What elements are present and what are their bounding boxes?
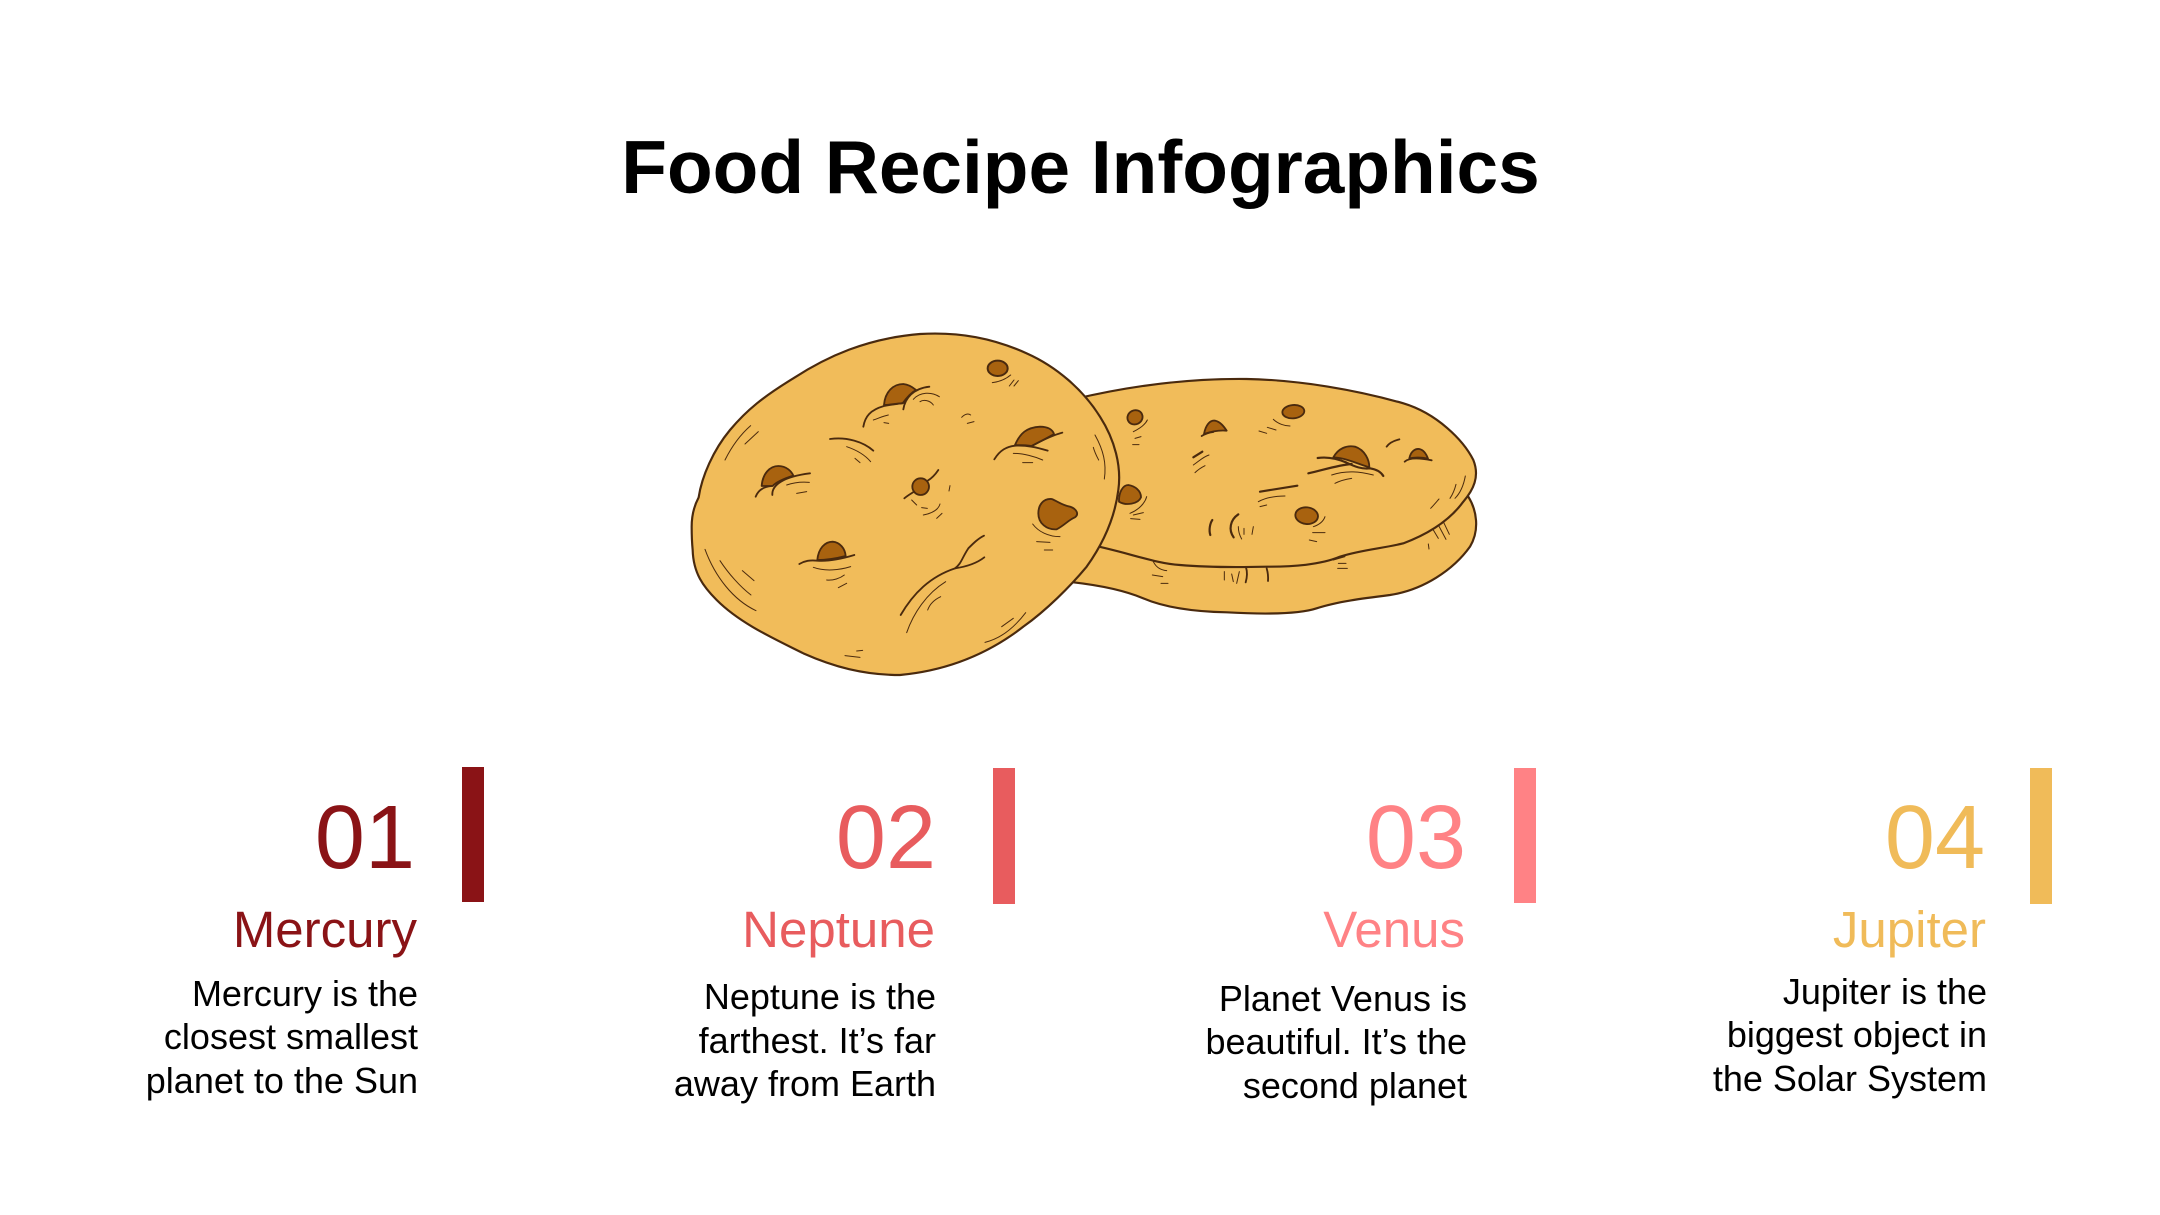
description Jupiter: the Solar System [1713,1058,1987,1099]
description Jupiter: Jupiter is the [1783,971,1987,1012]
description Mercury: Mercury is the [192,973,418,1014]
title: Food Recipe Infographics [621,125,1540,209]
icon: front cookie [692,334,1119,675]
description Neptune: away from Earth [674,1063,936,1104]
heading Mercury: Mercury [233,901,417,958]
panel: 04 Jupiter [1713,768,2052,1099]
heading Neptune: Neptune [742,901,935,958]
description Venus [1205,978,1467,1106]
icon: back cookies [1060,379,1476,614]
description Venus: beautiful. It’s the [1205,1021,1467,1062]
heading Jupiter: Jupiter [1833,901,1986,958]
description Mercury: planet to the Sun [146,1060,418,1101]
accent bar 02 [993,768,1015,904]
number 01: 01 [315,788,415,888]
description Neptune [674,976,936,1104]
description Neptune: Neptune is the [704,976,936,1017]
description Mercury [146,973,418,1101]
number 02: 02 [836,788,936,888]
description Neptune: farthest. It’s far [699,1020,936,1061]
panel: 02 Neptune [674,768,1015,1104]
description Jupiter: biggest object in [1727,1014,1987,1055]
panel: 01 Mercury [146,767,484,1101]
number 03: 03 [1366,788,1466,888]
accent bar 01 [462,767,484,902]
number 04: 04 [1885,788,1985,888]
description Jupiter [1713,971,1987,1099]
description Venus: Planet Venus is [1219,978,1467,1019]
illustration: cookies [692,334,1476,675]
heading Venus: Venus [1323,901,1465,958]
accent bar 03 [1514,768,1536,903]
description Venus: second planet [1243,1065,1467,1106]
accent bar 04 [2030,768,2052,904]
description Mercury: closest smallest [164,1016,418,1057]
panel: 03 Venus [1205,768,1536,1106]
